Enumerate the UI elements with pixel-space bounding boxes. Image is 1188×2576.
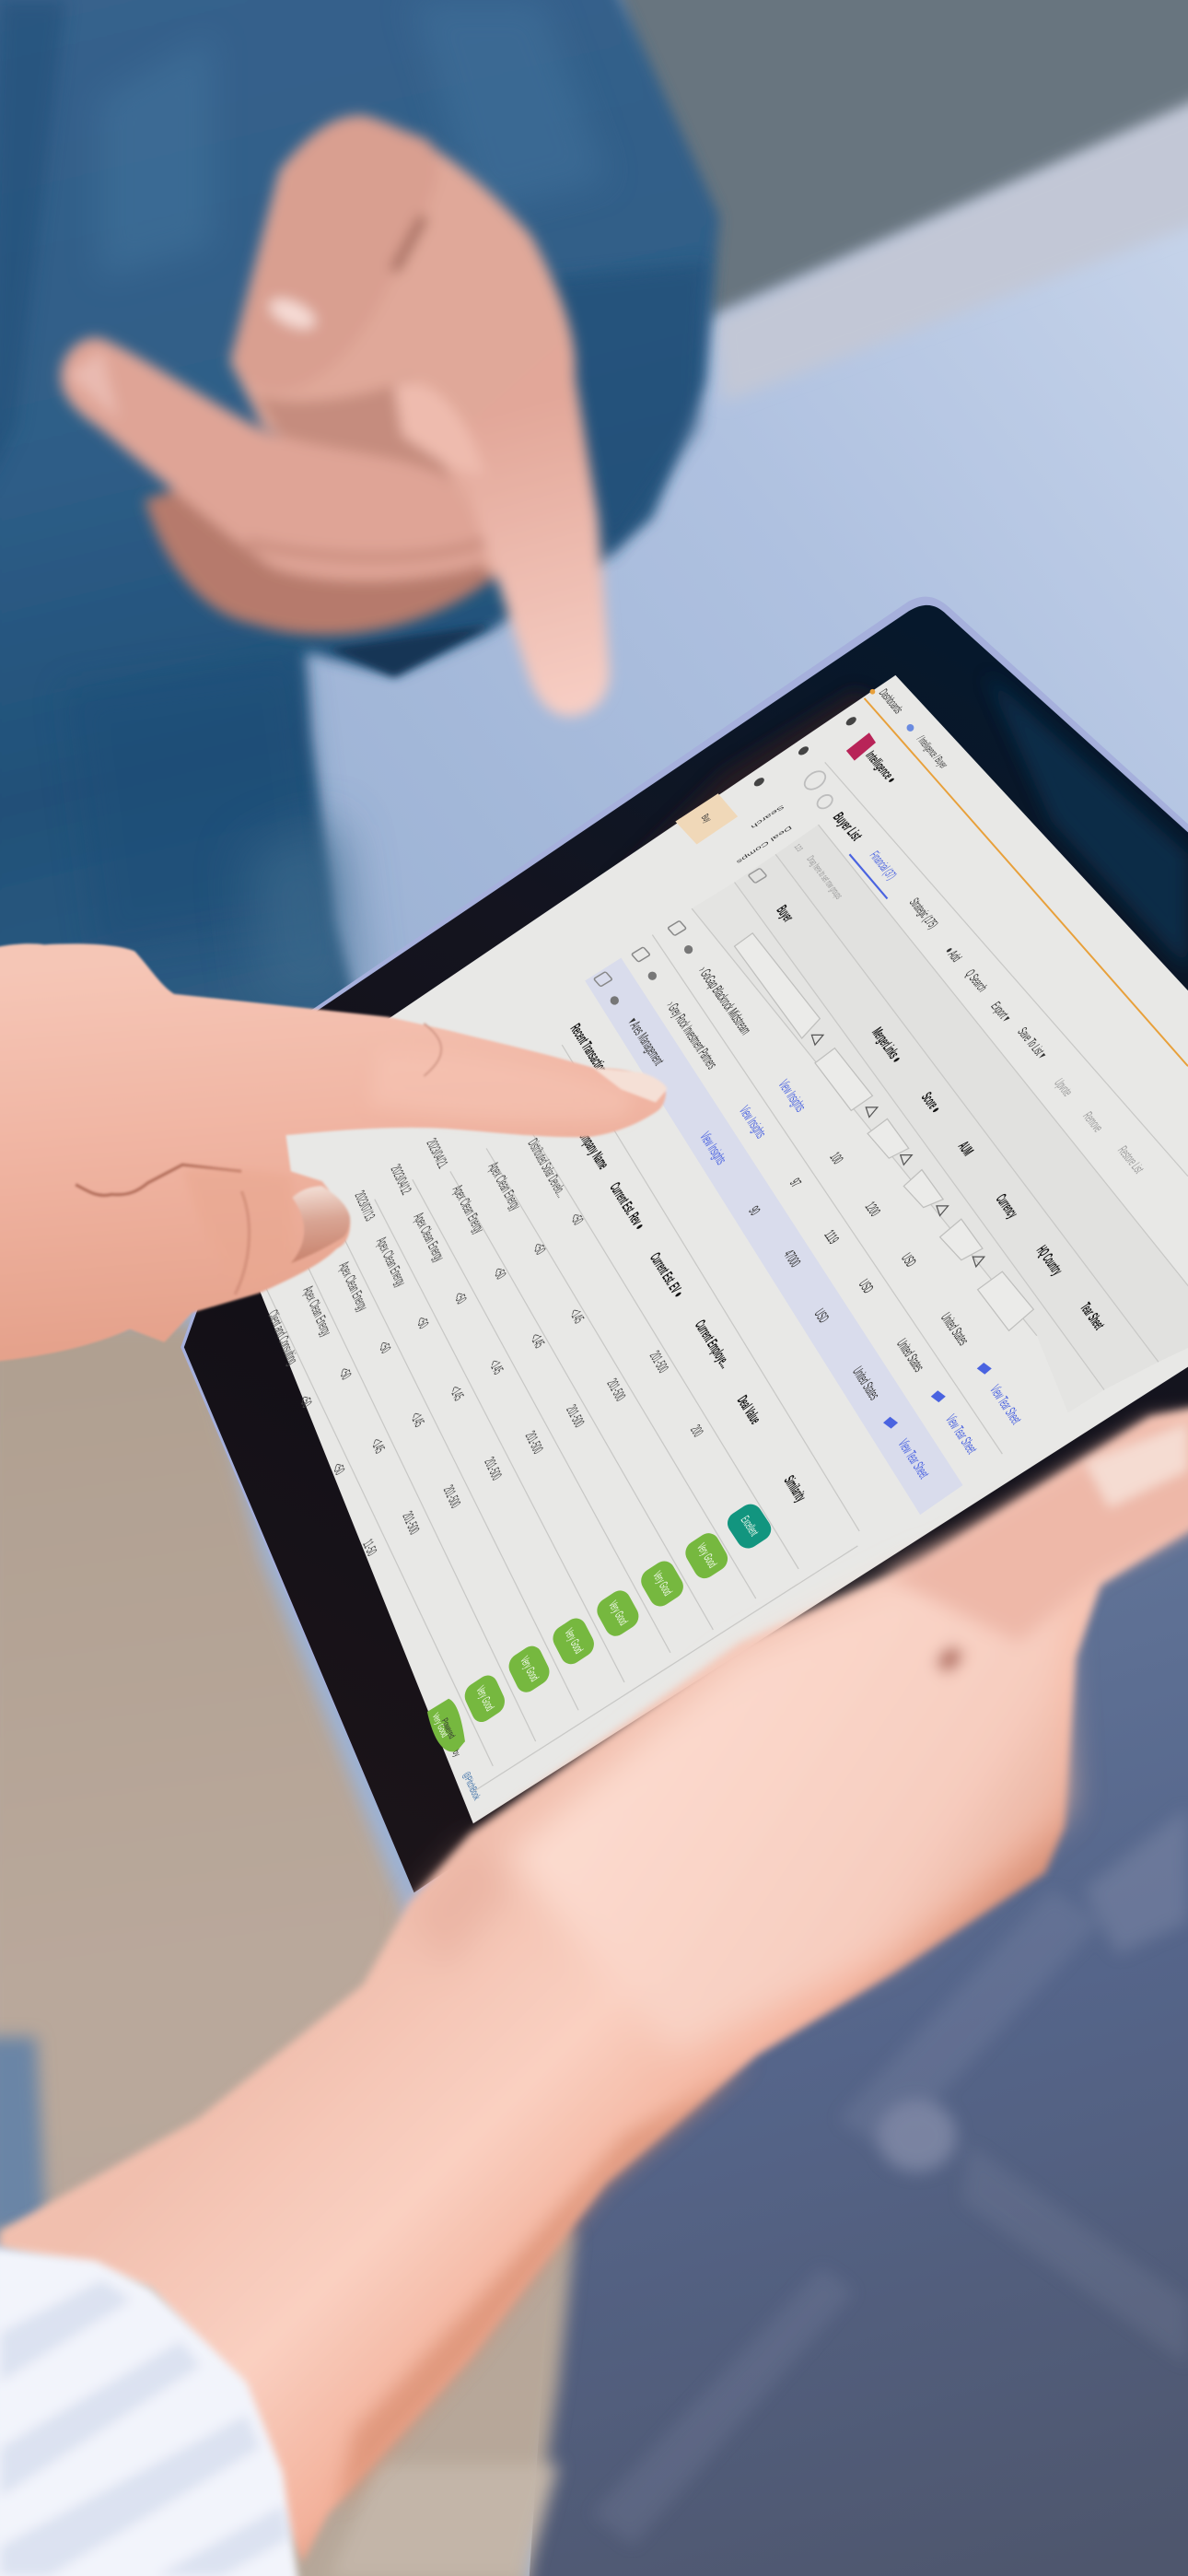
back fingers (145, 468, 493, 635)
similarity pills: Very Good (518, 1654, 541, 1684)
similarity pills: Very Good (430, 1711, 450, 1739)
buyer row: Ares Management (highlighted): View Tear Sheet (895, 1436, 932, 1481)
table header row: Buyer (774, 902, 798, 925)
buyer row: GoGap: USD (898, 1250, 919, 1270)
thumb nail (291, 1186, 350, 1263)
shaded left tendon (411, 1840, 509, 1972)
web crease between finger and thumb (76, 1165, 241, 1195)
left finger (61, 338, 493, 581)
buyer row: GoGap: View Insights (775, 1077, 809, 1115)
transaction rows: <50 (413, 1313, 431, 1332)
thumb (235, 115, 438, 392)
transaction rows: <50 (330, 1459, 347, 1478)
highlighted row band (585, 958, 963, 1515)
knuckle crease (424, 1024, 441, 1076)
transactions header row: Current Est. Rev ● (607, 1179, 649, 1233)
transaction rows: 201-500 (563, 1401, 588, 1431)
filter inputs (735, 933, 1033, 1330)
orange progress rule (865, 698, 1188, 1066)
hand and index finger (0, 943, 666, 1362)
nail (1085, 1423, 1188, 1508)
table header row: MergerLinks ● (868, 1024, 906, 1066)
powered by footer: @PitchBook (460, 1769, 483, 1802)
buyer row: Ares Management (highlighted): 90 (745, 1203, 763, 1218)
filter funnel icons (811, 1035, 984, 1267)
row dividers (262, 762, 1188, 1791)
similarity pills: Very Good (650, 1569, 674, 1598)
table header row: Score ● (918, 1089, 945, 1116)
list toolbar: Q Search (961, 967, 990, 994)
background: dark grey top-right wall (608, 0, 1188, 321)
buyer row: Ares Management (highlighted): 47000 (780, 1247, 804, 1270)
transactions header row (567, 1020, 810, 1505)
transaction rows: 2023/04/21 (424, 1135, 450, 1171)
transaction rows (265, 1135, 706, 1559)
similarity pills: Excellent (738, 1514, 761, 1539)
transaction rows: <145 (447, 1382, 467, 1404)
blue gap behind trousers (0, 2037, 46, 2234)
tablet top navigation: / Intelligence / Buyer (914, 734, 950, 771)
transaction rows: 201-500 (646, 1348, 671, 1376)
list toolbar (748, 809, 1147, 1177)
list toolbar: Upvote (1051, 1076, 1076, 1099)
powered by footer (439, 1715, 483, 1802)
table header row: Tear Sheet (1077, 1299, 1109, 1333)
transactions header row: Deal Value (734, 1392, 764, 1427)
breadcrumb dot (907, 724, 914, 732)
tablet top navigation: Deal Comps (735, 825, 793, 865)
trousers (0, 1322, 575, 2576)
table header row: Currency (993, 1190, 1022, 1222)
list toolbar: Drag here to set row groups (805, 853, 845, 901)
pointing finger (436, 337, 610, 716)
buyer row: Ares Management (highlighted): USD (811, 1306, 832, 1326)
buyer row: GoGap: › GoGap Blackrock Midstream (695, 964, 754, 1037)
transaction rows: <50 (336, 1364, 354, 1383)
buyer row: GoGap: 100 (826, 1150, 846, 1167)
floor tile highlights (591, 1807, 1188, 2547)
buyer row: Grey Rock: View Insights (736, 1103, 769, 1142)
man's jacket (0, 0, 719, 1035)
similarity pills: Very Good (562, 1626, 586, 1657)
table header row: HQ Country (1033, 1242, 1067, 1279)
thumb nail (265, 293, 320, 334)
transaction rows: Apex Clean Energy (300, 1282, 334, 1340)
transactions header row: Recent Transactions (567, 1020, 612, 1080)
woman's right arm and hand holding the tablet (0, 1405, 1188, 2563)
transaction rows: <145 (368, 1434, 388, 1457)
shaded wrist bottom edge (337, 2062, 756, 2511)
transaction rows: <50 (376, 1338, 393, 1356)
list toolbar: Buyer List (830, 809, 867, 844)
transactions header row: Current Employe... (692, 1317, 735, 1371)
list toolbar: Remove (1079, 1109, 1106, 1135)
filter band (692, 883, 1104, 1413)
transaction rows: Client and Consulting (265, 1306, 300, 1368)
similarity pills: Very Good (606, 1598, 630, 1628)
transaction rows: <145 (486, 1356, 507, 1377)
knuckle crease (935, 1645, 965, 1674)
transaction rows: 201-500 (400, 1508, 422, 1538)
tablet bezel (184, 605, 1188, 1892)
buyer row: GoGap: 1200 (862, 1199, 883, 1219)
buyer row: Ares Management (highlighted): View Insights (696, 1129, 729, 1167)
list toolbar: Financial (37) (867, 849, 899, 883)
transaction rows: <50 (490, 1264, 509, 1282)
transaction rows: Apex Clean Energy (373, 1234, 409, 1290)
transactions header row: Current Est. EV ● (646, 1249, 688, 1301)
buyer row: GoGap: United States (938, 1310, 972, 1348)
transaction rows: Apex Clean Energy (411, 1210, 448, 1265)
list toolbar: 123 (792, 842, 805, 853)
transaction rows: <50 (530, 1239, 549, 1258)
transaction rows: <50 (451, 1289, 470, 1307)
table header row: AUM (955, 1138, 977, 1159)
tablet top navigation: Intelligence ● (862, 749, 900, 786)
orange nav tab (675, 793, 738, 845)
transaction rows: 201-500 (440, 1482, 463, 1511)
tablet rim (181, 597, 1188, 1892)
transaction rows: Apex Clean Energy (336, 1259, 371, 1315)
list toolbar: Restore List (1114, 1143, 1147, 1177)
tablet screen (202, 675, 1188, 1823)
transactions header row: Company Name (574, 1124, 612, 1173)
transaction rows: 201-500 (604, 1376, 628, 1404)
tablet top navigation: Buy (699, 812, 714, 825)
background: pale diagonal band (715, 92, 1188, 403)
transaction rows: Apex Clean Energy (449, 1182, 487, 1236)
transaction rows: Distributed Solar Develo... (525, 1136, 569, 1200)
buyer row: Grey Rock: View Tear Sheet (942, 1411, 981, 1457)
transaction rows: 2023/07/13 (352, 1188, 378, 1224)
buyer row: Grey Rock: United States (893, 1336, 927, 1375)
buyer row: Grey Rock: USD (856, 1276, 877, 1296)
buyer row: Ares Management (highlighted) (594, 972, 932, 1481)
transaction rows: 201-500 (522, 1428, 546, 1457)
buyer row: GoGap (668, 920, 1025, 1427)
buyer row: Grey Rock: › Grey Rock Investment Partners (663, 998, 720, 1072)
powered by footer: by (451, 1747, 463, 1759)
thumb wrinkle (235, 1191, 250, 1294)
transaction rows: 2023/04/12 (388, 1161, 414, 1198)
transaction rows: 201-500 (482, 1454, 505, 1483)
similarity pills: Very Good (694, 1541, 719, 1571)
header band (735, 854, 1159, 1390)
buyer row: GoGap: View Tear Sheet (986, 1382, 1025, 1427)
index nail (593, 1068, 667, 1103)
list toolbar: ● Add (942, 944, 964, 965)
similarity pills (427, 1500, 775, 1751)
tablet top navigation: Dashboards (876, 686, 905, 716)
buyer row: Ares Management (highlighted): ▾ Ares Management (624, 1014, 667, 1069)
transaction rows: <145 (566, 1306, 587, 1327)
list toolbar: Strategic (175) (906, 896, 941, 931)
transaction rows: 11-50 (360, 1536, 379, 1559)
hand back highlight (509, 1528, 1068, 2054)
background: blue tile floor (526, 1282, 1188, 2576)
middle shadow (255, 378, 452, 485)
forearm and hand back (0, 1405, 1188, 2563)
transaction rows: Apex Clean Energy (485, 1159, 524, 1213)
tablet (181, 597, 1188, 1892)
buyer row: Grey Rock: 97 (786, 1176, 804, 1190)
transaction rows: <50 (567, 1210, 587, 1228)
list toolbar: Save To List ▾ (1014, 1025, 1050, 1061)
logo dot (870, 689, 875, 695)
buyer row: Ares Management (highlighted): United States (849, 1364, 882, 1403)
finger tone (887, 1413, 1188, 1643)
similarity pills: Very Good (473, 1683, 496, 1714)
hand back (230, 115, 598, 657)
woman's left hand pointing (0, 943, 667, 1362)
bezel reflection (608, 690, 887, 887)
crease (394, 217, 424, 271)
transaction rows: <145 (408, 1409, 427, 1430)
transaction rows: <50 (297, 1392, 315, 1411)
powered by footer: Powered (439, 1715, 458, 1741)
magenta tag (846, 732, 876, 761)
row group band (775, 825, 1188, 1362)
tablet top navigation: Search (750, 803, 785, 829)
transactions header row: Similarity (781, 1472, 810, 1505)
striped shirt cuff (0, 2247, 299, 2576)
round icons (801, 767, 835, 811)
list toolbar: Export ▾ (987, 1000, 1014, 1025)
buyer row: Grey Rock: 1119 (821, 1227, 842, 1247)
transaction rows: 200 (687, 1422, 706, 1440)
transaction rows: <145 (527, 1330, 547, 1352)
man's hand (61, 115, 610, 716)
buyer row: Grey Rock (632, 947, 981, 1457)
nav icons (752, 715, 857, 788)
finger highlight (369, 1051, 633, 1120)
tablet top navigation (675, 686, 950, 865)
thumb shading (182, 1168, 293, 1290)
table header row (774, 902, 1109, 1333)
